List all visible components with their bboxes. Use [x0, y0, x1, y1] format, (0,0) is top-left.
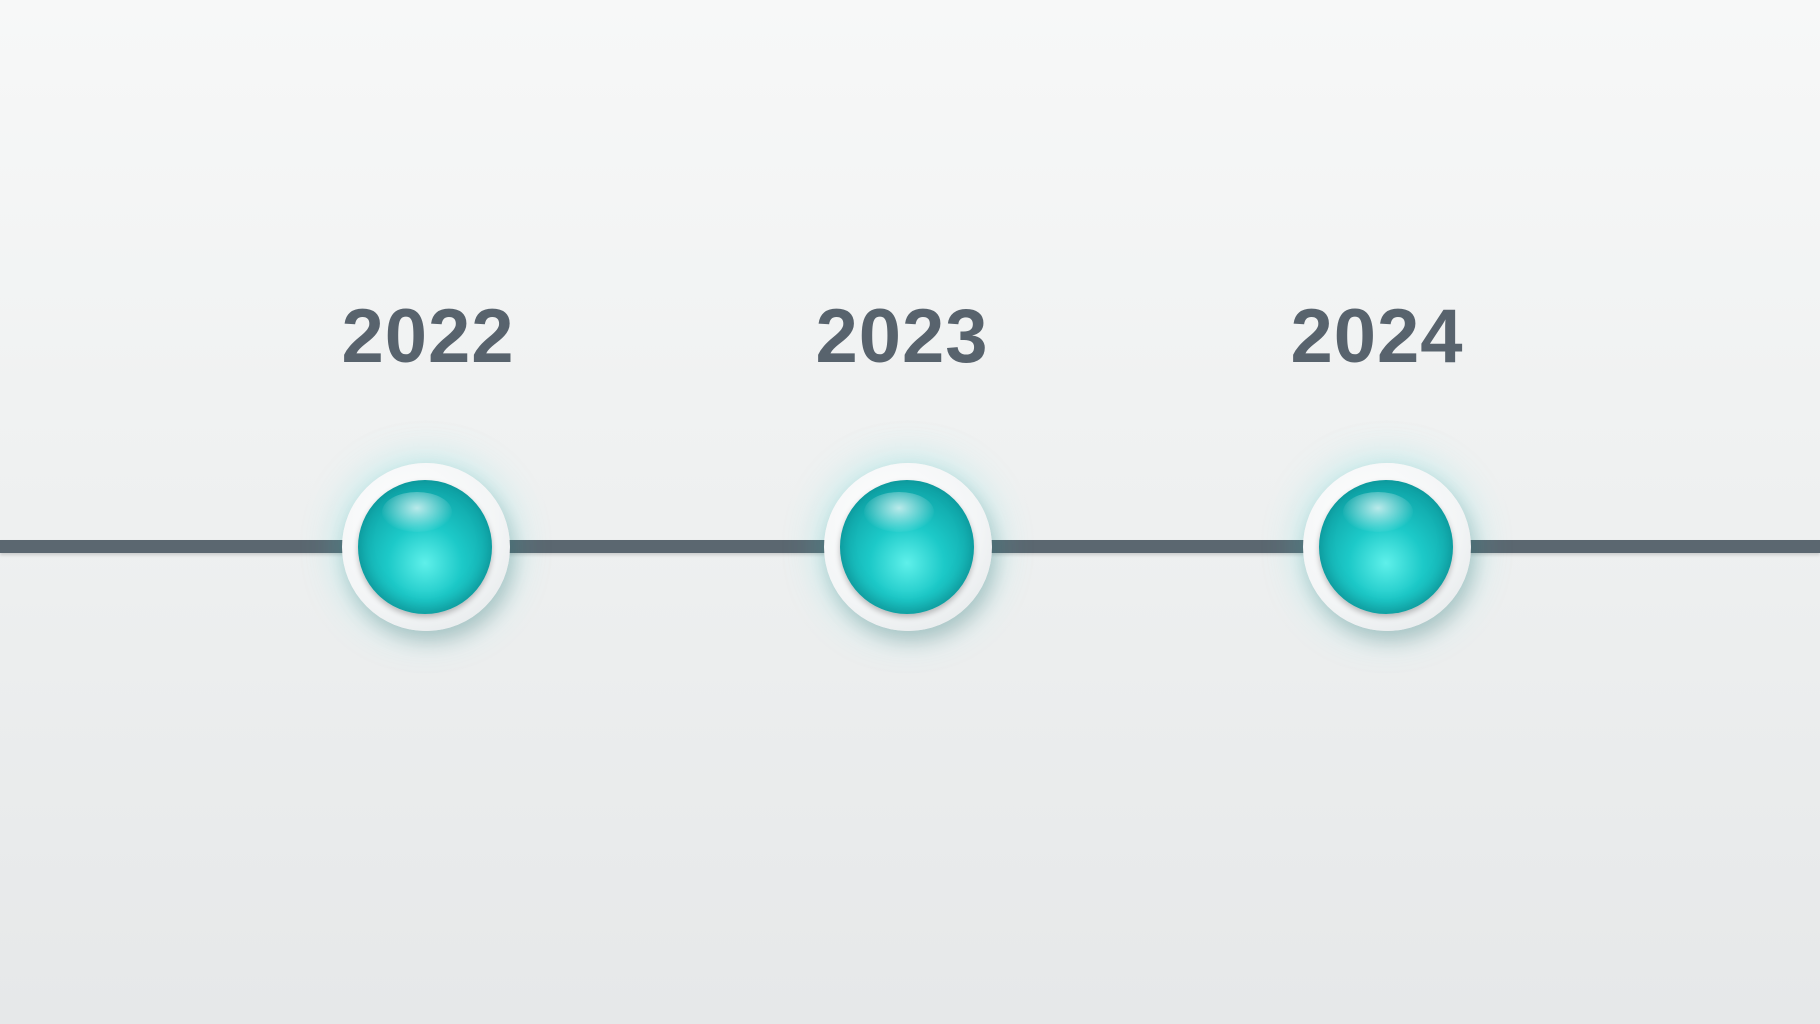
teal gem 2022: [358, 480, 492, 614]
timeline line: [0, 540, 1820, 553]
teal gem 2023: [840, 480, 974, 614]
node: 2023: [824, 463, 992, 631]
node: 2024: [1303, 463, 1471, 631]
teal gem 2024: [1319, 480, 1453, 614]
node: 2022: [342, 463, 510, 631]
year label: 2023: 2023: [815, 294, 989, 379]
year label: 2022: 2022: [341, 294, 515, 379]
year label: 2024: 2024: [1290, 294, 1464, 379]
